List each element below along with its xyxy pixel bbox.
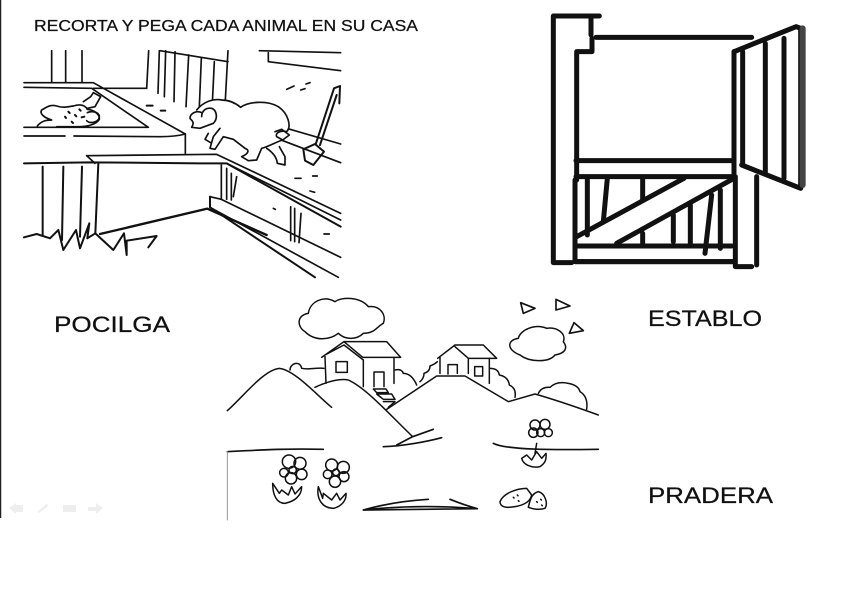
wall and frame xyxy=(553,16,752,263)
label: pocilga: POCILGA xyxy=(54,312,170,337)
walkway and ramp xyxy=(24,83,341,277)
back fence posts xyxy=(52,51,341,107)
label: pradera: PRADERA xyxy=(648,483,773,508)
clouds xyxy=(299,298,566,361)
lower gate with diagonal xyxy=(575,177,757,267)
walking pig xyxy=(190,100,289,165)
open door xyxy=(734,27,803,188)
path mound xyxy=(363,499,477,510)
title: RECORTA Y PEGA CADA ANIMAL EN SU CASA xyxy=(34,18,419,35)
rocks xyxy=(500,488,546,509)
illustration: meadow landscape xyxy=(227,298,598,520)
flowers and grass xyxy=(273,419,552,508)
illustration: stable with door xyxy=(553,16,803,267)
trough with piglets xyxy=(24,83,185,153)
label: establo: ESTABLO xyxy=(648,306,762,331)
front fence and grass xyxy=(24,163,267,255)
birds xyxy=(521,299,583,333)
houses xyxy=(322,342,497,387)
illustration: pigsty with pigs xyxy=(24,51,341,277)
shovel xyxy=(303,86,340,165)
slideshow controls xyxy=(9,503,103,514)
ground line xyxy=(227,429,598,452)
hills and bushes xyxy=(227,362,598,437)
